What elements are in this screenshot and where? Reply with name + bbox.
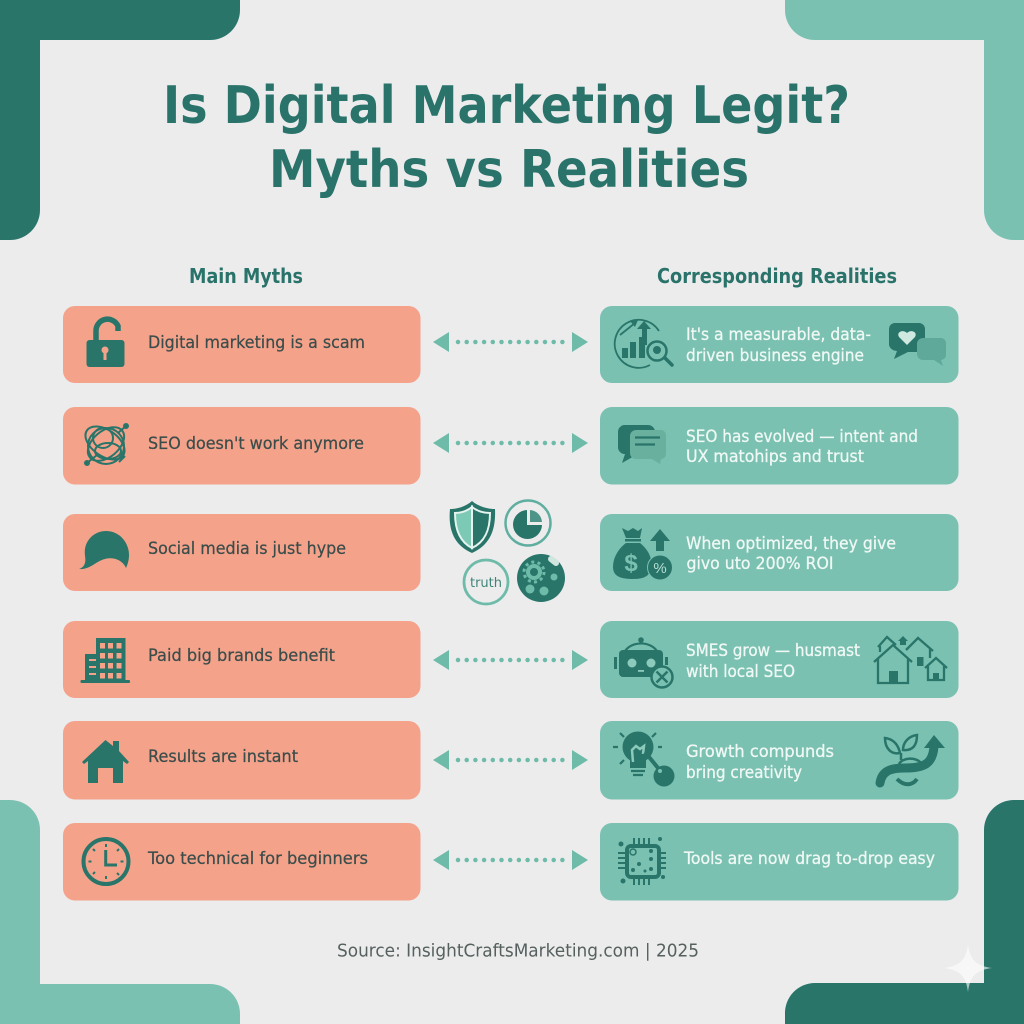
corner bracket: bottom right [785, 800, 1024, 1024]
myth 4 panel [63, 621, 420, 698]
title [163, 76, 850, 200]
myth 5 text: Results are instant [148, 747, 298, 767]
reality 3 text: givo uto 200% ROI [686, 554, 834, 574]
corner bracket: bottom left [0, 800, 240, 1024]
icon: heart chat bubbles [889, 323, 946, 366]
myth 3 text: Social media is just hype [148, 539, 346, 559]
myth 1 panel [63, 306, 420, 383]
arrow: row 1 [433, 332, 588, 352]
reality 4 text: SMES grow — husmast [686, 641, 860, 661]
myth 3 panel [63, 514, 420, 591]
myth 6 panel [63, 823, 420, 900]
corner bracket: top left [0, 0, 240, 240]
icon: lightbulb with hand [613, 732, 674, 786]
icon: speech bubble [79, 531, 129, 569]
icon: office buildings [80, 638, 130, 683]
reality 2 text: UX matohips and trust [686, 447, 864, 467]
reality 3 text [686, 534, 896, 574]
arrow: row 2 [433, 433, 588, 453]
icon: open padlock [86, 319, 124, 367]
reality 1 text: It's a measurable, data- [686, 325, 871, 345]
arrow: row 5 [433, 750, 588, 770]
icon: message bubbles [618, 425, 666, 464]
myth 4 text: Paid big brands benefit [148, 646, 335, 666]
corner bracket: top right [785, 0, 1024, 240]
myth 1 text: Digital marketing is a scam [148, 333, 365, 353]
reality 2 text: SEO has evolved — intent and [686, 427, 918, 447]
icon: circuit chip [618, 837, 666, 885]
myth 6 text: Too technical for beginners [147, 849, 368, 869]
icon: money bag with percent arrow: % [653, 560, 667, 577]
icon: clock [84, 839, 128, 884]
heading: main myths: Main Myths [189, 264, 303, 288]
icon: gear badge [517, 554, 565, 602]
reality 6 text: Tools are now drag to-drop easy [683, 849, 935, 869]
icon: truth badge: truth [470, 576, 502, 591]
arrow: row 4 [433, 650, 588, 670]
title: Is Digital Marketing Legit? [163, 76, 850, 136]
reality 1 text [686, 325, 871, 366]
icon: sprout with growth arrow [880, 735, 945, 784]
reality 3 text: When optimized, they give [686, 534, 896, 554]
reality 4 text [686, 641, 860, 682]
icon: house [82, 740, 129, 783]
reality 3 panel [600, 514, 958, 591]
icon: tangled lines [80, 420, 130, 467]
icon: robot with cross [614, 637, 672, 688]
reality 1 text: driven business engine [686, 346, 864, 366]
reality 6 panel [600, 823, 958, 900]
icon: truth badge [464, 560, 508, 604]
heading: corresponding realities: Corresponding Realities [657, 264, 897, 288]
reality 4 panel [600, 621, 958, 698]
myth 5 panel [63, 721, 420, 800]
myth 2 panel [63, 407, 420, 484]
reality 2 panel [600, 407, 958, 484]
title: Myths vs Realities [269, 140, 749, 200]
source line: Source: InsightCraftsMarketing.com | 2025 [337, 940, 699, 962]
icon: analytics with magnifier [615, 320, 672, 368]
reality 5 panel [600, 721, 958, 800]
arrow: row 6 [433, 850, 588, 870]
icon: money bag with percent arrow: $ [624, 550, 638, 577]
icon: shield [450, 501, 495, 553]
reality 5 text: Growth compunds [686, 742, 834, 762]
reality 2 text [686, 427, 918, 467]
icon: money bag with percent arrow [613, 528, 672, 580]
icon: pie chart in ring [506, 500, 550, 546]
reality 1 panel [600, 306, 958, 383]
icon: sparkle [944, 944, 992, 992]
icon: houses [874, 636, 947, 683]
reality 5 text: bring creativity [686, 763, 802, 783]
reality 5 text [686, 742, 834, 783]
reality 4 text: with local SEO [686, 662, 795, 682]
myth 2 text: SEO doesn't work anymore [148, 434, 364, 454]
